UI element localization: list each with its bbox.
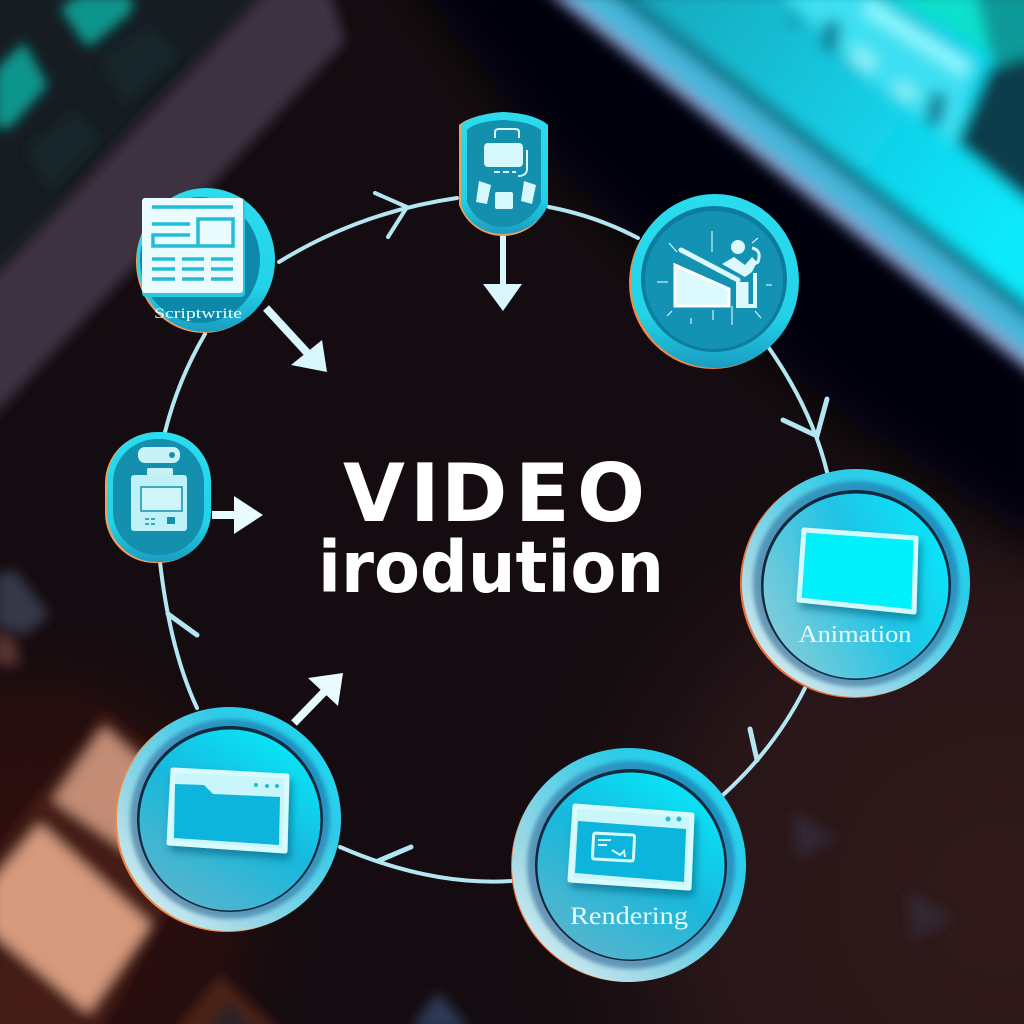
background: dark pane on the screen bbox=[957, 55, 1024, 212]
arrow: left node inward bbox=[212, 496, 263, 534]
background: teal tiles and list rows bbox=[0, 0, 180, 190]
arrow: scriptwrite inward bbox=[266, 308, 327, 372]
node: folder bbox=[115, 707, 341, 932]
icon: folder window bbox=[169, 770, 287, 851]
background: red tint lower left bbox=[0, 560, 340, 1024]
icon: script page bbox=[142, 198, 245, 297]
arrow: folder node inward bbox=[294, 673, 343, 723]
connector: animation to rendering bbox=[723, 688, 805, 795]
background: peach tiles lower left bbox=[0, 712, 290, 1024]
background: cyan screen top right bbox=[545, 0, 1024, 380]
connector: design to animation bbox=[769, 348, 827, 472]
background: warm brown lower right bbox=[480, 380, 1024, 1024]
background: purple diagonal band bbox=[0, 0, 345, 420]
node: animation bbox=[740, 469, 970, 698]
label: scriptwrite: Scriptwrite bbox=[154, 306, 242, 322]
connector: scriptwrite to storyboard bbox=[279, 193, 457, 262]
icon: designer at desk bbox=[675, 240, 759, 306]
title line: irodution: irodution bbox=[318, 526, 664, 609]
background: grey-blue chip at left edge bbox=[0, 570, 470, 1024]
arrow: top node inward bbox=[483, 236, 522, 311]
cycle ring connectors bbox=[160, 193, 827, 882]
node: design circle bbox=[629, 194, 799, 369]
connector: rendering to folder bbox=[340, 847, 511, 882]
icon: blank screen bbox=[799, 530, 916, 612]
node: scriptwrite bbox=[136, 188, 275, 333]
background: green corner of the screen bbox=[880, 0, 1024, 60]
connector: folder to recording bbox=[160, 562, 197, 708]
label: rendering: Rendering bbox=[570, 903, 689, 930]
icon: devices bbox=[476, 129, 536, 209]
connector: storyboard to design bbox=[549, 207, 638, 238]
background: toolbar strip on the screen bbox=[780, 0, 972, 142]
icon: camera bbox=[131, 447, 187, 531]
node: rendering bbox=[511, 748, 746, 982]
title line: VIDEO: VIDEO bbox=[343, 447, 645, 540]
connector: recording to scriptwrite bbox=[165, 334, 205, 432]
background: faint triangles lower right bbox=[792, 810, 955, 940]
background: toolbar glyphs on the screen bbox=[787, 16, 948, 128]
background: navy shadow behind cyan screen bbox=[400, 0, 1024, 560]
background: pale highlight line on the screen bbox=[866, 6, 968, 70]
label: animation: Animation bbox=[798, 622, 912, 648]
node: storyboard devices shield bbox=[459, 112, 548, 236]
node: recording device bbox=[105, 432, 211, 563]
title bbox=[318, 447, 664, 609]
background: blurred dark panel top left bbox=[0, 0, 280, 290]
icon: sparkle ticks bbox=[657, 231, 772, 325]
icon: render window bbox=[570, 806, 692, 888]
